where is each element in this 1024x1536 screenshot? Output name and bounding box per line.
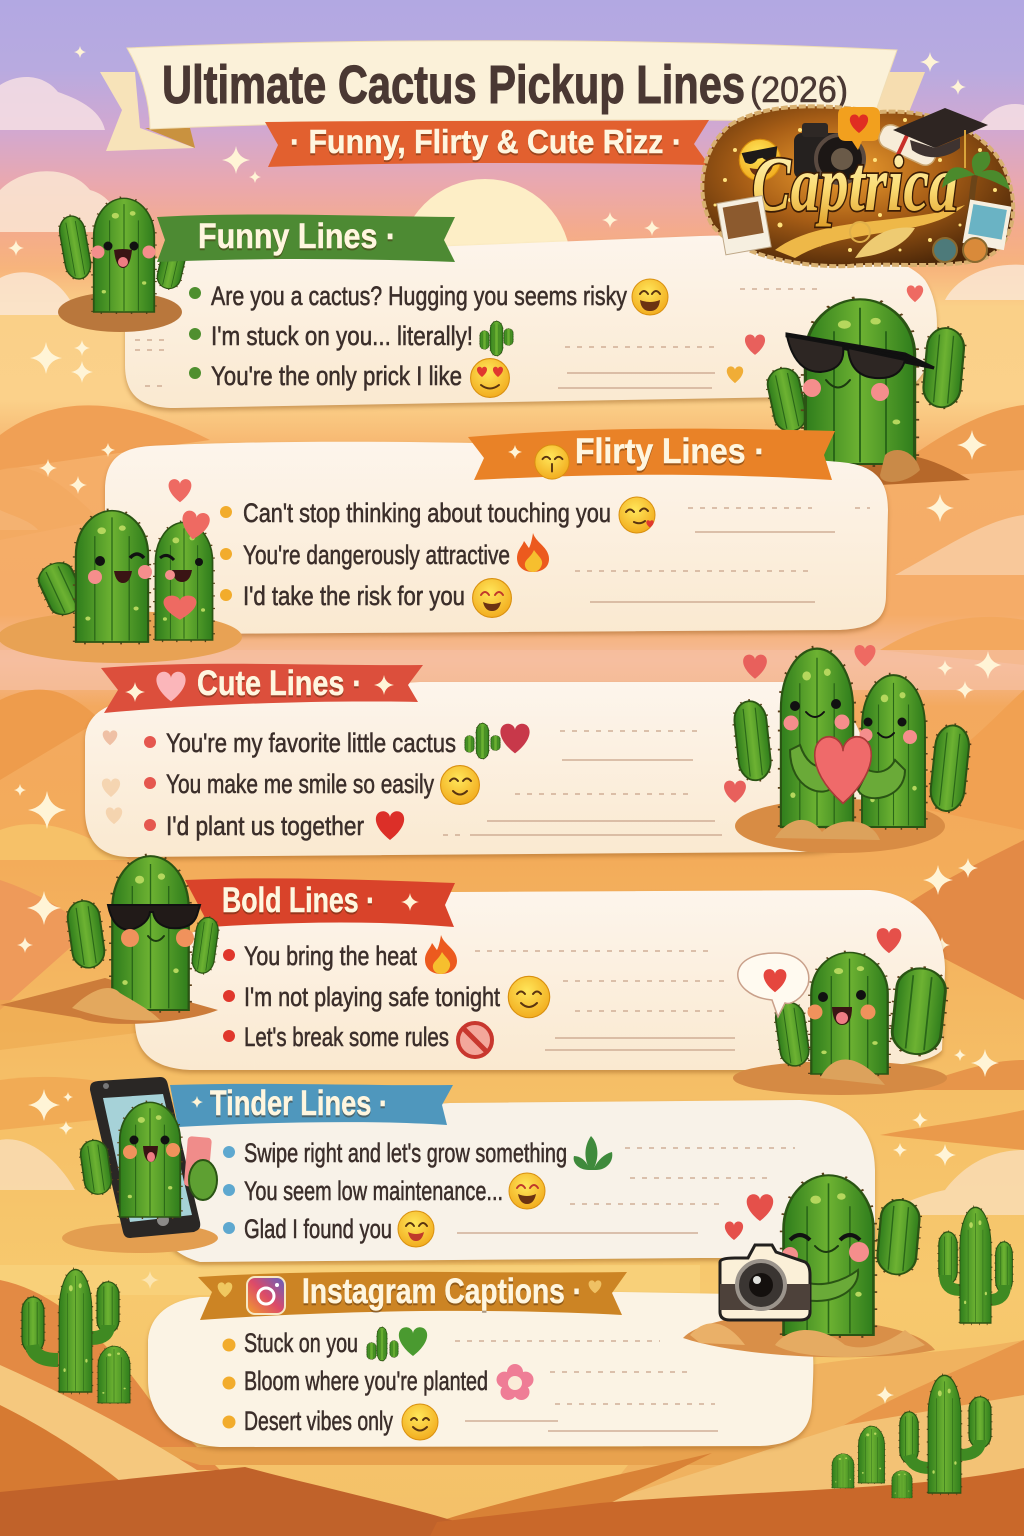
logo sparkles [714, 118, 997, 252]
list: cute lines: You're my favorite little cactus [166, 728, 456, 758]
panel: instagram captions [148, 1272, 813, 1447]
list: flirty lines: Can't stop thinking about touching you [243, 498, 611, 528]
cactus: upper right desert saguaro [939, 1207, 1012, 1323]
dunes [0, 405, 210, 470]
icon: cactus emoji [480, 321, 513, 356]
logo icon: polaroid [717, 196, 771, 255]
logo icon: shutter [850, 222, 870, 242]
icon: plant emoji [574, 1136, 612, 1170]
list: funny lines: You're the only prick I like [211, 361, 462, 391]
cactus: mascot in phone [62, 1077, 218, 1253]
icon: smiling blush emoji [473, 579, 511, 617]
logo icon: diploma [875, 121, 941, 169]
cactus: lower right desert group [832, 1375, 991, 1498]
list: tinder lines: You seem low maintenance... [244, 1176, 503, 1206]
list: bold lines: Let's break some rules [244, 1022, 449, 1052]
icon: hearts around couple [724, 645, 875, 803]
ribbon: flirty lines: Flirty Lines · [575, 432, 765, 471]
icon: fire emoji [517, 533, 549, 572]
logo icon: camera [794, 123, 864, 183]
cactus: sunglasses mascot [765, 299, 970, 485]
clouds [0, 77, 1024, 1215]
list: funny lines: Are you a cactus? Hugging you seems risky [211, 281, 627, 311]
logo icon: sunglasses emoji [739, 139, 781, 181]
list: instagram captions [222, 1328, 488, 1436]
list: bold lines [223, 941, 500, 1052]
panel: cute lines [85, 645, 971, 857]
sun [399, 179, 571, 351]
logo icon: feather [855, 227, 915, 258]
logo wordmark: Captrica [752, 140, 958, 227]
ribbon: cute lines: Cute Lines · [197, 664, 362, 703]
logo icon: beach photo [963, 200, 1012, 250]
list: bold lines: I'm not playing safe tonight [244, 982, 500, 1012]
cactus: mascot with camera [683, 1175, 935, 1357]
list: bold lines: You bring the heat [244, 941, 417, 971]
panel: tinder lines [62, 1077, 875, 1262]
panel: flirty lines [0, 429, 888, 663]
list: tinder lines [223, 1138, 567, 1244]
ribbon: instagram captions [198, 1272, 627, 1320]
icon: fire emoji [425, 935, 457, 974]
callout: speech bubble with heart [738, 953, 809, 1017]
ribbon: funny lines [157, 215, 455, 262]
icon: cactus and heart emoji [465, 723, 530, 759]
ribbon: flirty lines [468, 429, 835, 480]
cactus: cool mascot with sunglasses [0, 856, 220, 1024]
logo icon: sunglasses [933, 238, 987, 262]
icon: hearts around sunglasses mascot [727, 285, 923, 383]
ribbon tails [100, 72, 925, 151]
list: tinder lines: Glad I found you [244, 1214, 392, 1244]
cactus: mascot with speech bubble [733, 952, 948, 1095]
ribbon: bold lines [185, 878, 455, 927]
icon: cactus and green heart [367, 1327, 427, 1361]
list: flirty lines [220, 498, 611, 611]
ribbon: tinder lines: Tinder Lines · [210, 1084, 388, 1123]
ribbon: instagram captions: Instagram Captions · [302, 1272, 582, 1311]
ribbon: funny lines: Funny Lines · [198, 217, 396, 256]
icon: instagram logo [247, 1277, 285, 1314]
main title: Ultimate Cactus Pickup Lines [162, 55, 745, 115]
logo swoosh [775, 205, 965, 258]
cactus: winking couple [0, 511, 242, 663]
logo icon: heart speech bubble [838, 107, 880, 150]
logo icon: palm tree [942, 152, 1010, 225]
icon: happy emoji [509, 1173, 545, 1209]
icon: faint hearts [102, 730, 122, 824]
icon: camera [720, 1245, 810, 1320]
list: funny lines [189, 281, 627, 391]
icon: hearts above couple [169, 479, 211, 542]
cactus: waving mascot [57, 198, 189, 332]
list: cute lines [144, 728, 456, 841]
cactus: hugging couple with heart [733, 649, 971, 853]
list: flirty lines: You're dangerously attractive [243, 540, 510, 570]
ribbon: cute lines [101, 664, 423, 713]
logo icon: graduation cap [893, 108, 988, 168]
panel: funny lines [57, 198, 970, 485]
icon: relaxed emoji [508, 976, 550, 1018]
year: (2026) [750, 69, 848, 110]
list: instagram captions: Bloom where you're planted [244, 1366, 488, 1396]
icon: red heart [376, 811, 404, 840]
icon: smiling emoji [398, 1211, 434, 1247]
list: funny lines: I'm stuck on you... literally! [211, 321, 473, 351]
list: cute lines: You make me smile so easily [166, 769, 434, 799]
icon: no entry sign [458, 1023, 492, 1057]
icon: grinning emoji [632, 279, 668, 315]
icon: heart eyes emoji [471, 359, 509, 397]
ribbon: bold lines: Bold Lines · [222, 881, 375, 920]
list: instagram captions: Desert vibes only [244, 1406, 393, 1436]
icon: kissing emoji [619, 497, 655, 533]
logo: Captrica badge [702, 106, 1013, 266]
icon: pink flower [496, 1364, 534, 1400]
subtitle ribbon: · Funny, Flirty & Cute Rizz · [290, 123, 682, 160]
list: cute lines: I'd plant us together [166, 811, 364, 841]
icon: heart [877, 928, 901, 953]
list: instagram captions: Stuck on you [244, 1328, 358, 1358]
icon: smile emoji [441, 766, 479, 804]
list: tinder lines: Swipe right and let's grow something [244, 1138, 567, 1168]
panel: bold lines [0, 856, 948, 1095]
title banner [100, 41, 925, 151]
cactus: left desert group [22, 1270, 130, 1403]
icon: smile emoji [402, 1404, 438, 1440]
list: flirty lines: I'd take the risk for you [243, 581, 465, 611]
icon: hearts by camera mascot [725, 1194, 773, 1240]
